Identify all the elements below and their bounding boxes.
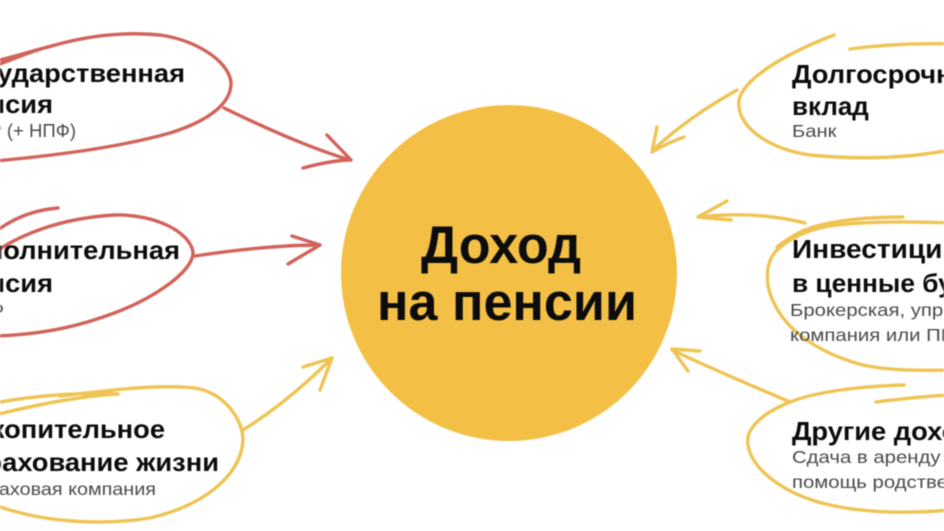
panel: securities investments bbox=[767, 217, 944, 370]
arrow: other income to income bbox=[672, 349, 790, 402]
arrow: state pension to income bbox=[224, 108, 351, 168]
arrow: life insurance to income bbox=[243, 358, 332, 430]
arrow: deposit to income bbox=[652, 90, 737, 152]
yellow hand-drawn oval bbox=[748, 385, 944, 512]
red hand-drawn oval bbox=[0, 34, 231, 161]
red hand-drawn oval bbox=[0, 208, 193, 336]
central circle: income in retirement bbox=[341, 105, 677, 441]
central circle: income in retirement: Доход bbox=[421, 216, 581, 275]
yellow hand-drawn oval bbox=[767, 217, 944, 370]
yellow hand-drawn oval bbox=[0, 387, 243, 522]
central circle: income in retirement: на пенсии bbox=[377, 273, 637, 332]
provider note: Банк bbox=[792, 122, 837, 142]
heading second line: вклад bbox=[792, 91, 869, 121]
panel: life insurance bbox=[0, 387, 243, 522]
panel: supplementary pension bbox=[0, 208, 193, 336]
panel: other income bbox=[748, 385, 944, 512]
arrow: supplementary pension to income bbox=[195, 236, 320, 264]
panel: state pension bbox=[0, 34, 231, 161]
arrow: securities to income bbox=[698, 201, 805, 223]
panel: long-term deposit bbox=[739, 35, 944, 158]
yellow hand-drawn oval bbox=[739, 35, 944, 158]
